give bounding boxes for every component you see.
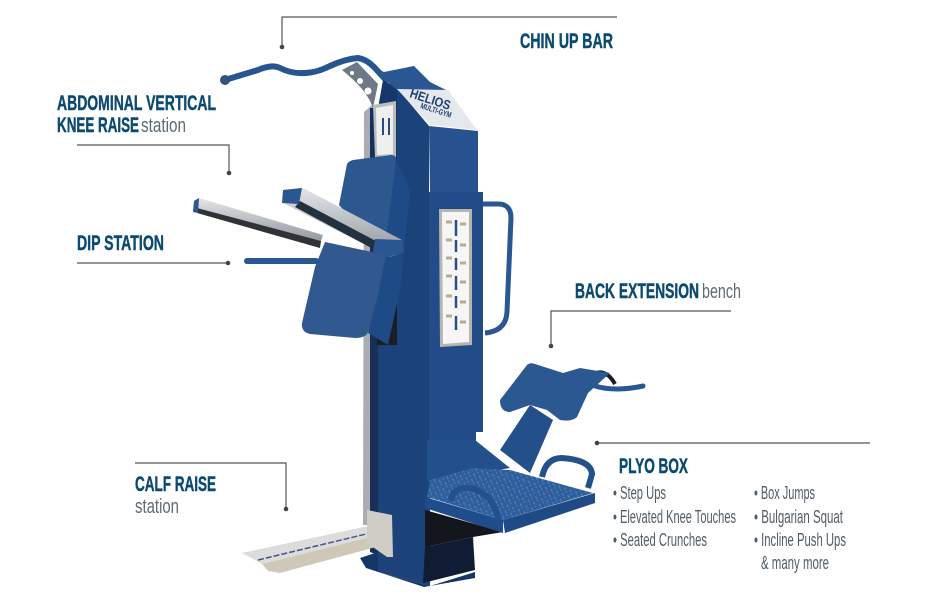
- callout: back extension bench: BACK EXTENSION: [575, 280, 699, 303]
- callout: abdominal vertical knee raise station: KNEE RAISE: [57, 114, 139, 137]
- gray rear column: [363, 104, 373, 525]
- callout: abdominal vertical knee raise station: [57, 92, 231, 175]
- calf raise: [242, 510, 393, 573]
- callout: calf raise station: [135, 463, 288, 518]
- callout: calf raise station: CALF RAISE: [135, 473, 216, 496]
- plyo box exercises, left column: • Step Ups: [613, 483, 666, 503]
- callout: plyo box: [595, 441, 870, 573]
- callout: back extension bench: [549, 280, 741, 348]
- top cap and label: HELIOS: [408, 86, 453, 113]
- plyo box exercises, right column: & many more: [761, 553, 829, 573]
- plyo box exercises, left column: [613, 483, 736, 550]
- callout: abdominal vertical knee raise station: station: [141, 115, 186, 137]
- lower instruction placard: [439, 209, 472, 347]
- upper instruction placard: [373, 101, 396, 158]
- multi-gym machine: [193, 58, 643, 587]
- callout: back extension bench: bench: [702, 281, 741, 303]
- callout: dip station: [77, 232, 230, 265]
- plyo box exercises, right column: [754, 483, 846, 573]
- plyo box exercises, right column: • Box Jumps: [754, 483, 815, 503]
- tower: [360, 80, 483, 587]
- back extension bench: [500, 363, 643, 473]
- side handle: [483, 204, 511, 333]
- top cap and label: MULTI-GYM: [419, 101, 453, 120]
- callout: abdominal vertical knee raise station: ABDOMINAL VERTICAL: [57, 92, 216, 115]
- callout: calf raise station: station: [135, 496, 179, 518]
- chin up bar: [220, 58, 386, 108]
- plyo box exercises, left column: • Elevated Knee Touches: [613, 507, 736, 527]
- plyo box exercises, right column: • Bulgarian Squat: [754, 507, 843, 527]
- callout: dip station: DIP STATION: [77, 232, 164, 255]
- knee raise back pad: [302, 155, 410, 345]
- plyo box: [423, 440, 595, 583]
- plyo box exercises, left column: • Seated Crunches: [613, 530, 707, 550]
- dip station bars: [193, 188, 404, 261]
- callout: plyo box: PLYO BOX: [619, 455, 688, 478]
- callout: chin up bar: [280, 17, 617, 53]
- callout: chin up bar: CHIN UP BAR: [520, 30, 613, 53]
- plyo box exercises, right column: • Incline Push Ups: [754, 530, 846, 550]
- top cap and label: [372, 66, 477, 130]
